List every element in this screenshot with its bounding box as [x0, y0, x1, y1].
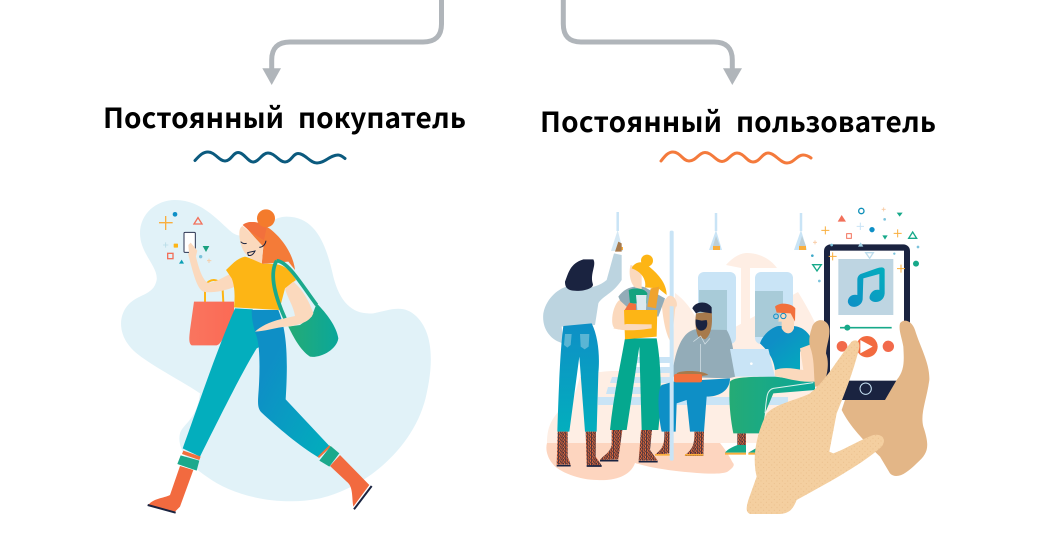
illustration: subway passengers — [546, 212, 825, 480]
floating icons — [159, 212, 211, 264]
floating icons — [811, 207, 919, 282]
hand on phone — [188, 243, 197, 257]
background blob — [121, 200, 431, 501]
home button — [860, 383, 871, 394]
heading: regular buyer — [103, 97, 466, 137]
face — [239, 226, 263, 265]
hair top — [243, 222, 267, 240]
right boot — [318, 446, 372, 509]
phone and hands — [725, 207, 929, 514]
heading: regular user — [540, 101, 936, 141]
music note — [848, 267, 885, 307]
player buttons — [837, 341, 847, 352]
front leg — [252, 310, 330, 457]
window: left — [698, 272, 736, 344]
heading: regular buyer: покупатель — [298, 97, 466, 137]
window: right — [755, 272, 793, 344]
wave divider: user — [661, 152, 811, 163]
pillar — [726, 253, 777, 345]
hanging handles — [611, 212, 807, 251]
arrow: to regular buyer — [262, 0, 442, 85]
seats — [598, 357, 788, 405]
shirt — [226, 257, 296, 310]
arrow: to regular user — [563, 0, 742, 85]
wave divider: buyer — [195, 152, 345, 163]
front hand — [747, 340, 884, 514]
seated young man — [725, 304, 815, 455]
mouth, eye, ear — [241, 241, 266, 255]
passengers — [543, 231, 736, 466]
back leg — [183, 308, 260, 457]
hair bun — [257, 209, 275, 227]
vertical pole — [670, 231, 674, 461]
album art — [838, 259, 893, 315]
shopping bag — [189, 280, 234, 345]
left boot — [148, 451, 201, 513]
gripping hand on pole — [668, 296, 677, 307]
woman with groceries — [600, 255, 676, 462]
back hand — [842, 321, 929, 476]
woman from behind — [543, 242, 622, 466]
bag strap — [273, 261, 317, 318]
phone body — [824, 244, 910, 400]
progress slider — [840, 325, 892, 330]
pale background — [547, 292, 825, 443]
hair back — [243, 222, 295, 270]
illustration: woman shopping with phone — [121, 200, 431, 513]
arm in pocket — [255, 282, 313, 332]
heading: regular buyer: Постоянный — [103, 97, 284, 137]
heading: regular user: пользователь — [736, 101, 936, 141]
floor — [546, 443, 734, 480]
seated man — [655, 303, 736, 456]
phone — [184, 232, 195, 252]
raised arm — [188, 250, 235, 292]
back thumb — [809, 320, 829, 387]
heading: regular user: Постоянный — [540, 101, 722, 141]
green shoulder bag — [288, 303, 338, 357]
